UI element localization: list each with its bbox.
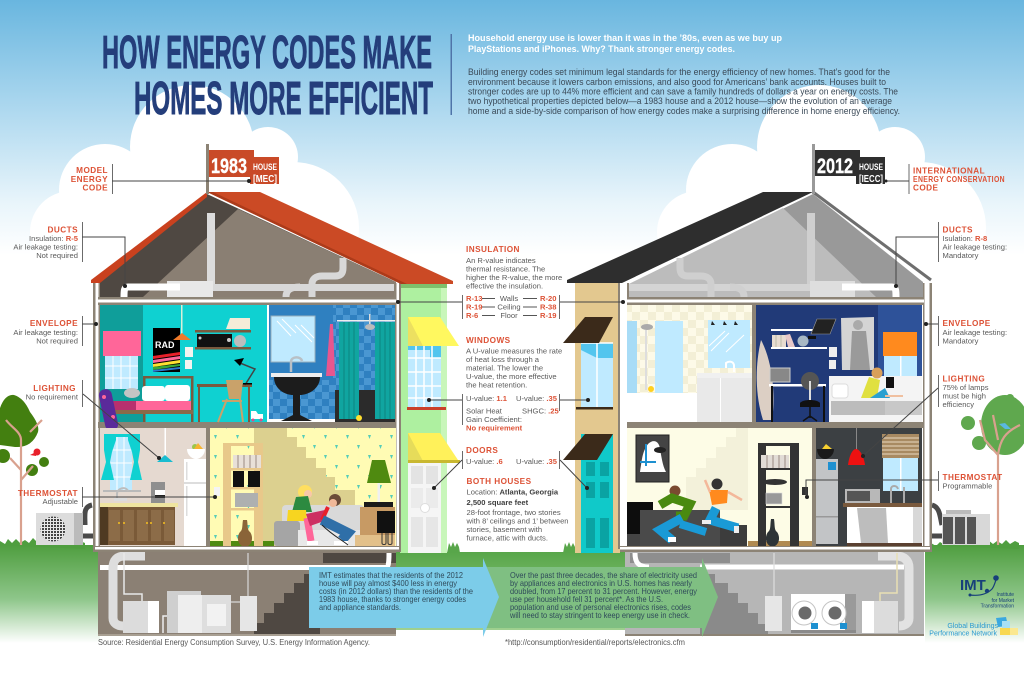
annex 1983 with windows and door [400,283,460,553]
bookcase [223,443,263,546]
callout: lighting 2012: 75% of lamps [942,383,989,392]
IMT logo: Institute [996,592,1014,598]
cloud behind 2012 house [657,85,986,294]
doors explainer [432,446,589,490]
IMT logo: for Market [991,598,1015,604]
source notes: *http://consumption/residential/reports/electronics.cfm [505,638,685,647]
green arrow panel: doubled, from 17 percent to 31 percent. However, energy [510,586,698,596]
callout: lighting 1983: LIGHTING [33,384,76,393]
callout: ducts 1983: Not required [36,251,78,260]
IMT logo: IMT [960,577,986,594]
source notes [98,638,685,647]
awning yellow lower [408,433,460,463]
door 1983 [408,463,441,553]
IMT logo [960,575,1015,610]
R-value comparison table: Ceiling [497,302,521,312]
both houses text: furnace, attic with ducts. [466,534,548,542]
callout: envelope 1983: Air leakage testing: [13,328,78,337]
windows explainer: U-value, the more effective [466,372,557,381]
shower curtain [335,314,395,422]
callout: lighting 1983 [26,380,161,460]
callout: ducts 1983 [13,222,127,288]
bed [108,376,194,422]
windows explainer: material. The lower the [466,364,543,372]
doors explainer: U-value: .35 [516,457,558,466]
awning brown lower [563,434,613,460]
surfboard [757,340,774,420]
both houses text: BOTH HOUSES [466,477,532,486]
callout: ducts 2012 [894,222,1007,288]
blue arrow panel [309,558,499,637]
green arrow panel: population and use of personal electronics rises, codes [510,602,691,612]
green arrow panel: Over the past three decades, the share of electricity used [510,570,697,580]
poster [841,317,874,370]
callout: lighting 2012: LIGHTING [942,374,985,384]
lead text [468,33,782,55]
green arrow panel: will need to stay stringent to keep energy use in check. [509,610,690,620]
notes [829,347,837,369]
kitchen 1983 [100,428,206,546]
windows explainer: Gain Coefficient: [466,415,522,424]
shelves and stereo [185,318,251,369]
tree right [961,394,1024,545]
desk, chair and lamp [197,358,255,422]
man in green [660,486,706,542]
callout: envelope 2012: ENVELOPE [942,319,991,328]
callout: lighting 2012 [861,374,989,458]
house 2012 [567,192,932,552]
title: HOMES MORE EFFICIENT [134,72,433,124]
callout: ducts 2012: DUCTS [942,226,973,234]
lead text: PlayStations and iPhones. Why? Thank stronger energy codes. [468,44,735,55]
R-value comparison table [396,294,625,320]
floor lamp [367,460,391,505]
door 2012 [581,434,613,553]
tree left [0,395,49,545]
girl on sofa [287,485,327,545]
callout: envelope 2012: Air leakage testing: [942,328,1007,337]
callout: ducts 1983: Insulation: R-5 [29,234,79,243]
microwave [845,489,880,503]
window [883,332,917,388]
wall TV [808,319,836,339]
intro paragraph: stronger codes are up to 44% more efficient and can save a family hundreds of dollars a year on energy costs. The [468,86,898,96]
towel [326,324,335,376]
roof 1983 [91,192,453,284]
both houses text: Location: Atlanta, Georgia [466,488,559,496]
callout: model energy code: ENERGY [71,175,108,184]
title [102,26,433,124]
fridge [184,459,206,546]
window 1983 [407,346,446,410]
intro paragraph: environment because it lowers carbon emissions, and also good for Americans’ bank accounts. Houses built to [468,77,886,87]
basement 1983 [98,552,396,636]
doors explainer: U-value: .6 [466,457,503,466]
callout: model energy code: CODE [83,184,108,192]
AC unit left [36,505,93,545]
R-value comparison table: Walls [500,294,518,303]
insulation explainer: INSULATION [466,245,520,254]
flag: 2012 house: [IECC] [859,174,883,185]
flag: 2012 house [812,144,885,194]
R-value comparison table: R-19 [466,302,482,312]
intro paragraph: home and a side-by-side comparison of how energy codes make a surprising difference in home energy efficiency. [468,106,900,116]
title: HOW ENERGY CODES MAKE [102,26,432,78]
RAD poster [153,328,180,372]
blue arrow panel: house will pay almost $400 less in energy [319,578,458,588]
ground: centre strip [396,542,628,630]
intro paragraph: Building energy codes set minimum legal standards for the energy efficiency of new homes. That’s good for the [468,67,890,77]
vanity [697,362,752,422]
flag: 2012 house: 2012 [817,155,853,178]
R-value comparison table: R-38 [540,302,556,312]
attic 1983 [100,194,396,297]
man in orange [702,478,742,533]
callout: international energy conservation code [884,164,1005,194]
dark bookcase [758,443,799,546]
insulation explainer [466,245,562,290]
bedroom 2012 [752,305,922,422]
R-value comparison table: R-13 [466,294,482,303]
callout: lighting 2012: efficiency [942,400,974,409]
sofa [274,505,364,546]
callout: lighting 1983: No requirement [26,392,79,402]
coffee maker [151,482,165,503]
sofa [640,510,747,546]
thermostat [214,487,220,496]
windows explainer: WINDOWS [466,336,511,345]
shower [627,321,697,422]
ground: right lawn [925,540,1024,643]
windows explainer: SHGC: .25 [522,406,560,416]
ground: left lawn [0,538,100,643]
callout: envelope 1983: Not required [36,336,78,346]
callout: envelope 1983: ENVELOPE [30,319,78,328]
callout: thermostat 2012: THERMOSTAT [942,473,1003,482]
roof 2012 [567,192,931,283]
walls 1983 [93,283,401,552]
header divider [450,34,452,115]
R-value comparison table: R-6 [466,311,478,320]
windows explainer: No requirement [466,424,523,432]
callout: thermostat 1983: THERMOSTAT [18,489,78,498]
awning brown top [563,317,613,343]
callout: ducts 2012: Air leakage testing: [942,242,1007,252]
R-value comparison table: Floor [500,311,518,320]
insulation explainer: higher the R-value, the more [466,273,562,282]
flag: 1983 house: HOUSE [253,162,277,172]
living room 1983 [206,428,396,546]
skateboard [98,388,119,432]
flag: 1983 house: [MEC] [253,174,277,185]
fridge [816,459,838,544]
callout: ducts 2012: Isulation: R-8 [942,234,987,243]
callout: international energy conservation code: CODE [913,184,939,192]
mirror and lights [708,320,750,368]
pendant lamp [173,305,191,340]
callout: ducts 2012: Mandatory [942,251,979,260]
callout: thermostat 1983: Adjustable [43,497,78,506]
RAD poster: RAD [155,340,175,350]
red pendant [848,428,865,465]
Global Buildings Performance Network logo: Performance Network [929,630,997,638]
cloud behind 1983 house [30,85,359,294]
bedroom 1983 [98,305,267,432]
attic ducts 2012 [627,213,896,298]
windows explainer: of heat loss through a [466,355,540,364]
awning yellow top [408,317,459,346]
shelves [771,329,827,349]
Global Buildings Performance Network logo [929,617,1018,638]
bathroom 2012 [627,305,752,422]
blue arrow panel: and appliance standards. [319,602,401,612]
insulation explainer: thermal resistance. The [466,264,545,274]
thermostat [802,487,808,495]
faucet [891,486,905,503]
TV [627,502,653,546]
window 2012 [576,343,613,410]
both houses text: with 8’ ceilings and 1’ between [466,516,569,526]
both houses text [466,477,569,542]
flag: 1983 house [206,144,279,194]
green arrow panel: use per household fell 31 percent*. As the U.S. [510,594,663,604]
cabinets [100,503,178,545]
both houses text: 2,500 square feet [466,498,529,507]
intro paragraph: two hypothetical properties depicted below—a 1983 house and a 2012 house—show the evolution of an average [468,96,892,106]
blue arrow panel: 1983 house, thanks to stronger energy codes [319,594,466,604]
callout: envelope 2012 [924,316,1007,346]
Global Buildings Performance Network logo: Global Buildings [947,623,998,630]
sky background [0,0,1024,255]
windows explainer: the heat retention. [466,380,527,390]
callout: thermostat 1983 [18,487,217,507]
attic 2012 [627,194,923,297]
windows explainer [427,336,590,432]
windows explainer: U-value: .35 [516,394,558,403]
callout: thermostat 2012: Programmable [942,482,992,490]
callout: model energy code [71,164,251,194]
bathroom 1983 [269,305,395,422]
doors explainer: DOORS [466,446,498,455]
mirror [271,316,315,362]
flag: 1983 house: 1983 [211,155,247,178]
house 1983 [91,192,453,552]
blue arrow panel: IMT estimates that the residents of the 2012 [319,570,463,580]
boy on sofa [322,494,348,545]
callout: thermostat 2012 [805,471,1003,499]
callout: international energy conservation code: ENERGY CONSERVATION [913,175,1005,184]
window with blinds [882,434,919,491]
counter and cabinets [843,503,922,546]
windows explainer: A U-value measures the rate [466,346,562,356]
walls 2012 [620,283,932,552]
both houses text: stories, basement with [466,525,542,534]
green arrow panel: by appliances and electronics in U.S. homes has nearly [510,578,693,588]
faucet [114,488,128,501]
basement 2012 [625,552,924,636]
TV and stand [355,502,395,546]
pendant [157,428,173,462]
callout: ducts 1983: Air leakage testing: [13,242,78,252]
green arrow panel [483,558,718,637]
window and valance [103,331,141,389]
blue arrow panel: costs (in 2012 dollars) than the residents of the [319,586,473,596]
windows explainer: U-value: 1.1 [466,394,508,403]
annex 2012 with windows and door [563,283,620,553]
window with curtains [101,434,142,492]
kitchen 2012 [812,428,922,546]
insulation explainer: An R-value indicates [466,256,536,265]
both houses text: 28-foot frontage, two stories [466,508,561,517]
intro paragraph [468,67,900,116]
poster [636,435,669,482]
bed with person [829,368,922,422]
attic ducts 1983 [124,213,395,298]
callout: envelope 1983 [13,316,98,346]
fruit bowl [817,444,834,459]
living room 2012 [627,428,812,546]
source notes: Source: Residential Energy Consumption Survey, U.S. Energy Information Agency. [98,638,370,647]
fruit bowl [187,443,205,459]
AC unit right [932,505,990,545]
sink [271,357,322,421]
roller skate [251,411,263,422]
callout: model energy code: MODEL [76,166,108,175]
callout: international energy conservation code: INTERNATIONAL [913,166,985,176]
lead text: Household energy use is lower than it was in the ’80s, even as we buy up [468,33,782,44]
callout: envelope 2012: Mandatory [942,336,979,346]
callout: lighting 2012: must be high [942,392,986,400]
callout: ducts 1983: DUCTS [48,226,78,234]
insulation explainer: effective the insulation. [466,282,543,290]
IMT logo: Transformation [981,604,1014,610]
windows explainer: Solar Heat [466,406,503,416]
desk and laptop [769,368,826,422]
flag: 2012 house: HOUSE [859,162,883,172]
R-value comparison table: R-20 [540,294,556,303]
R-value comparison table: R-19 [540,311,556,320]
